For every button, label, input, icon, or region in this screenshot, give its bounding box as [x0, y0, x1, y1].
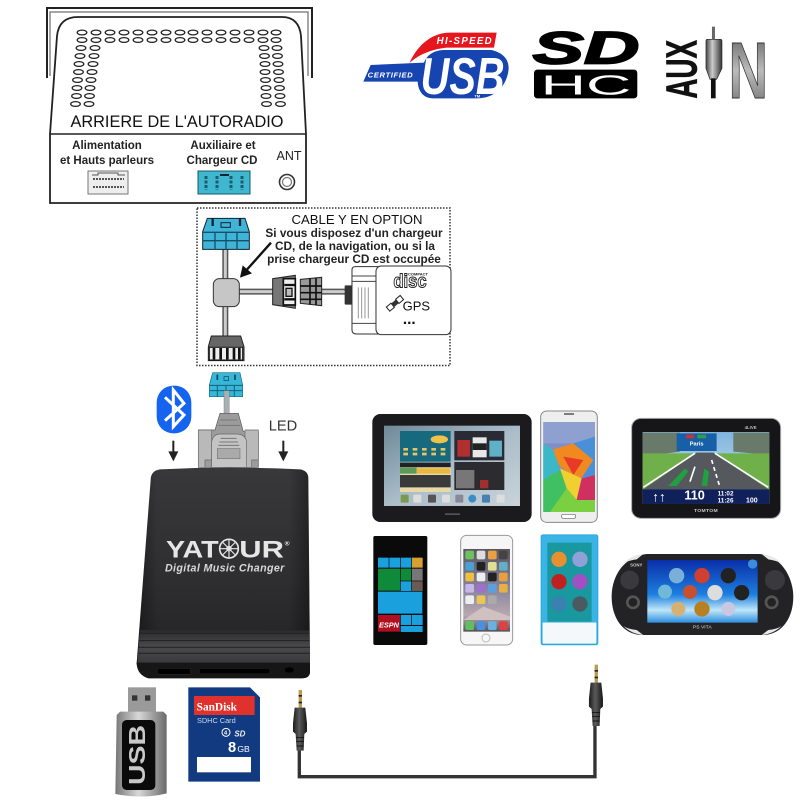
power and speakers label: et Hauts parleurs — [60, 155, 154, 167]
radio title: ARRIERE DE L'AUTORADIO — [70, 113, 284, 131]
USB certified logo: HI-SPEED — [437, 36, 492, 47]
AUX socket — [285, 667, 294, 673]
SDHC logo: SD — [533, 22, 639, 73]
SDHC logo — [533, 22, 639, 100]
module edge shading — [137, 468, 310, 678]
GPS satellite icon — [386, 295, 404, 311]
SDHC logo: HC — [541, 69, 631, 100]
Windows phone: ESPN — [379, 620, 400, 629]
bluetooth icon — [157, 386, 191, 433]
heading: optional Y cable: CABLE Y EN OPTION — [292, 213, 422, 227]
LED arrow — [278, 441, 288, 461]
module base strip — [137, 663, 310, 678]
explanation text: Si vous disposez d'un chargeur — [265, 226, 443, 240]
radio body — [50, 17, 306, 203]
tablet — [372, 414, 532, 522]
AUX IN logo: AUX — [658, 40, 707, 99]
aux and CD changer label: Chargeur CD — [187, 155, 257, 167]
aux and CD changer label: Auxiliaire et — [190, 140, 256, 152]
GPS label: GPS — [403, 299, 430, 314]
iPhone — [461, 535, 513, 645]
power connector — [88, 171, 128, 194]
cable lines — [225, 248, 347, 337]
Samsung smartphone — [541, 411, 597, 522]
dotted frame — [197, 208, 450, 366]
SD card: SanDisk — [197, 701, 238, 713]
module lower band — [137, 630, 310, 663]
TomTom GPS: 11:02 — [718, 491, 734, 498]
ellipsis dots: ... — [403, 311, 416, 328]
top blue connector — [203, 218, 249, 249]
plug head — [345, 285, 353, 305]
PS Vita: PS VITA — [693, 625, 712, 631]
module body — [137, 468, 310, 678]
SD card: 8 — [228, 740, 236, 756]
male connector — [273, 275, 295, 308]
USB certified logo: TM — [474, 93, 481, 98]
bluetooth arrow — [168, 441, 178, 461]
antenna socket — [280, 174, 294, 190]
cable lines highlight — [225, 248, 347, 337]
YATOUR brand: UR — [239, 536, 284, 563]
YATOUR brand: ® — [285, 539, 290, 547]
iPod nano — [542, 535, 597, 644]
AUX IN logo: N — [729, 26, 768, 115]
TomTom GPS — [632, 418, 781, 518]
bottom connector — [208, 336, 244, 361]
panel: compatible devices — [372, 411, 793, 645]
TomTom GPS: 4LIVE — [745, 425, 757, 430]
SD card: GB — [237, 744, 250, 754]
panel: rear of car radio — [47, 8, 312, 203]
arrow to junction — [240, 243, 271, 278]
YATOUR brand — [166, 536, 290, 563]
SD card: SDHC Card — [197, 716, 236, 725]
power and speakers label: Alimentation — [72, 140, 142, 152]
TomTom GPS: Paris — [690, 441, 704, 447]
blue connector — [209, 373, 243, 397]
USB stick: USB — [124, 725, 150, 785]
antenna label: ANT — [276, 149, 302, 163]
TomTom GPS: 110 — [684, 488, 705, 502]
radio mounting bracket — [47, 8, 312, 78]
Windows phone — [373, 536, 427, 645]
PS Vita: SONY — [630, 563, 643, 568]
USB slot — [157, 668, 191, 674]
explanation text: CD, de la navigation, ou si la — [275, 239, 435, 253]
female connector — [300, 277, 322, 306]
compact disc mark: COMPACT — [408, 271, 428, 276]
band grooves — [138, 633, 310, 653]
Y cable diagram — [203, 218, 451, 361]
ventilation holes — [71, 30, 285, 106]
left jack plug — [293, 690, 307, 751]
product subtitle: Digital Music Changer — [165, 563, 285, 575]
TomTom GPS: TOMTOM — [694, 508, 718, 514]
TomTom GPS: ↑↑ — [652, 490, 666, 505]
SD card — [188, 687, 260, 782]
explanation text: prise chargeur CD est occupée — [267, 252, 441, 266]
audio cable — [299, 725, 595, 777]
panel: USB, SDHC and AUX logos — [363, 22, 768, 115]
SD card: SD — [234, 730, 246, 739]
CD changer connector — [198, 171, 250, 194]
PS Vita — [612, 554, 793, 635]
TomTom GPS: 100 — [746, 498, 758, 505]
LED label: LED — [269, 419, 297, 435]
junction box — [213, 279, 239, 307]
SD slot — [200, 669, 269, 673]
AUX IN logo — [658, 26, 768, 115]
USB certified logo: USB — [421, 47, 505, 105]
panel: optional Y cable — [197, 208, 451, 366]
YATOUR brand: YAT — [166, 536, 219, 563]
CD changer unit — [352, 266, 451, 335]
compact disc mark: disc — [393, 272, 427, 293]
SD card: 4 — [224, 731, 228, 737]
right jack plug — [589, 665, 603, 726]
TomTom GPS: 11:26 — [718, 498, 734, 505]
USB stick — [115, 687, 167, 796]
DB connector plug — [198, 413, 258, 467]
panel: Yatour module — [137, 373, 310, 678]
USB certified logo — [363, 33, 509, 105]
connector cable — [224, 391, 229, 416]
divider line — [50, 133, 306, 135]
USB certified logo: CERTIFIED — [368, 71, 413, 80]
panel: media accessories — [115, 665, 603, 796]
